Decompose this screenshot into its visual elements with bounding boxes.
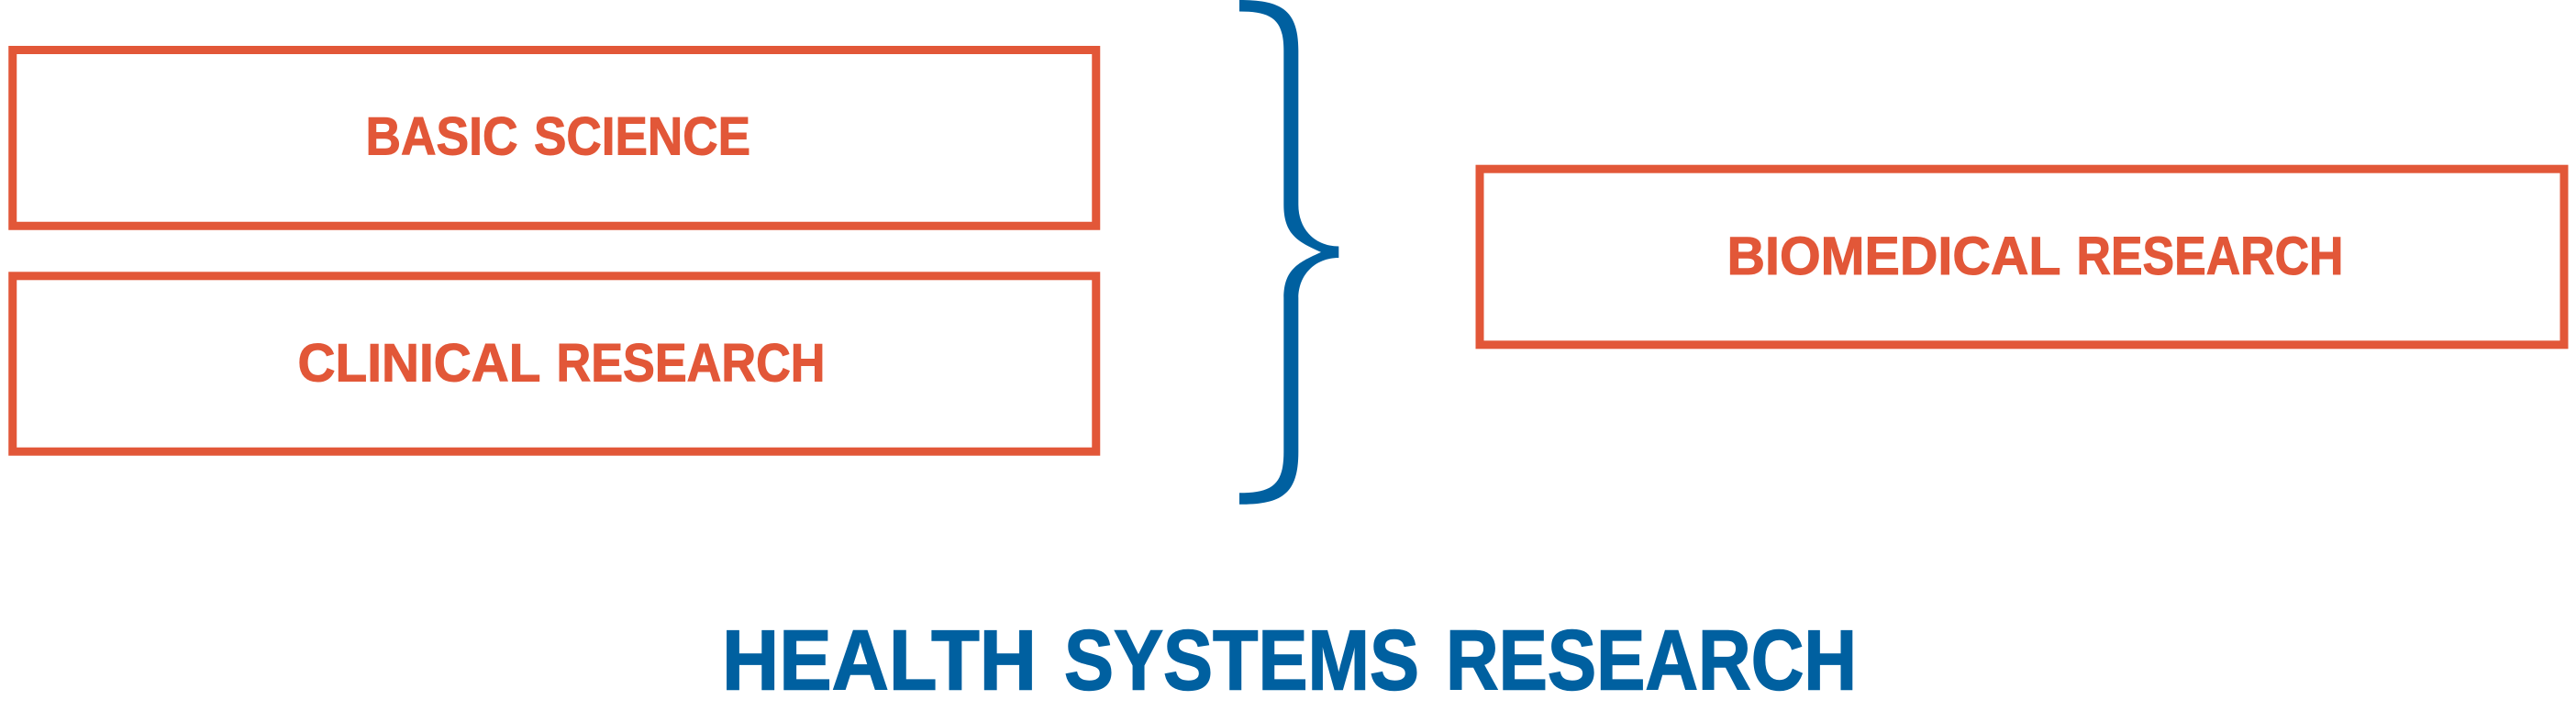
panel: clinical research <box>13 276 1096 451</box>
label: clinical research <box>297 334 826 394</box>
heading: health systems research: SYSTEMS <box>1064 613 1419 708</box>
icon: curly brace <box>1239 0 1338 505</box>
heading: health systems research: RESEARCH <box>1446 613 1857 708</box>
label: clinical research: CLINICAL <box>297 334 541 394</box>
label: basic science <box>365 107 750 167</box>
panel: biomedical research <box>1480 169 2564 345</box>
panel: basic science <box>13 50 1096 226</box>
label: basic science: SCIENCE <box>534 107 750 167</box>
heading: health systems research <box>722 613 1857 708</box>
label: clinical research: RESEARCH <box>556 334 826 394</box>
label: biomedical research <box>1727 227 2343 286</box>
heading: health systems research: HEALTH <box>722 613 1037 708</box>
label: biomedical research: RESEARCH <box>2077 227 2343 286</box>
label: biomedical research: BIOMEDICAL <box>1727 227 2060 286</box>
label: basic science: BASIC <box>365 107 517 167</box>
